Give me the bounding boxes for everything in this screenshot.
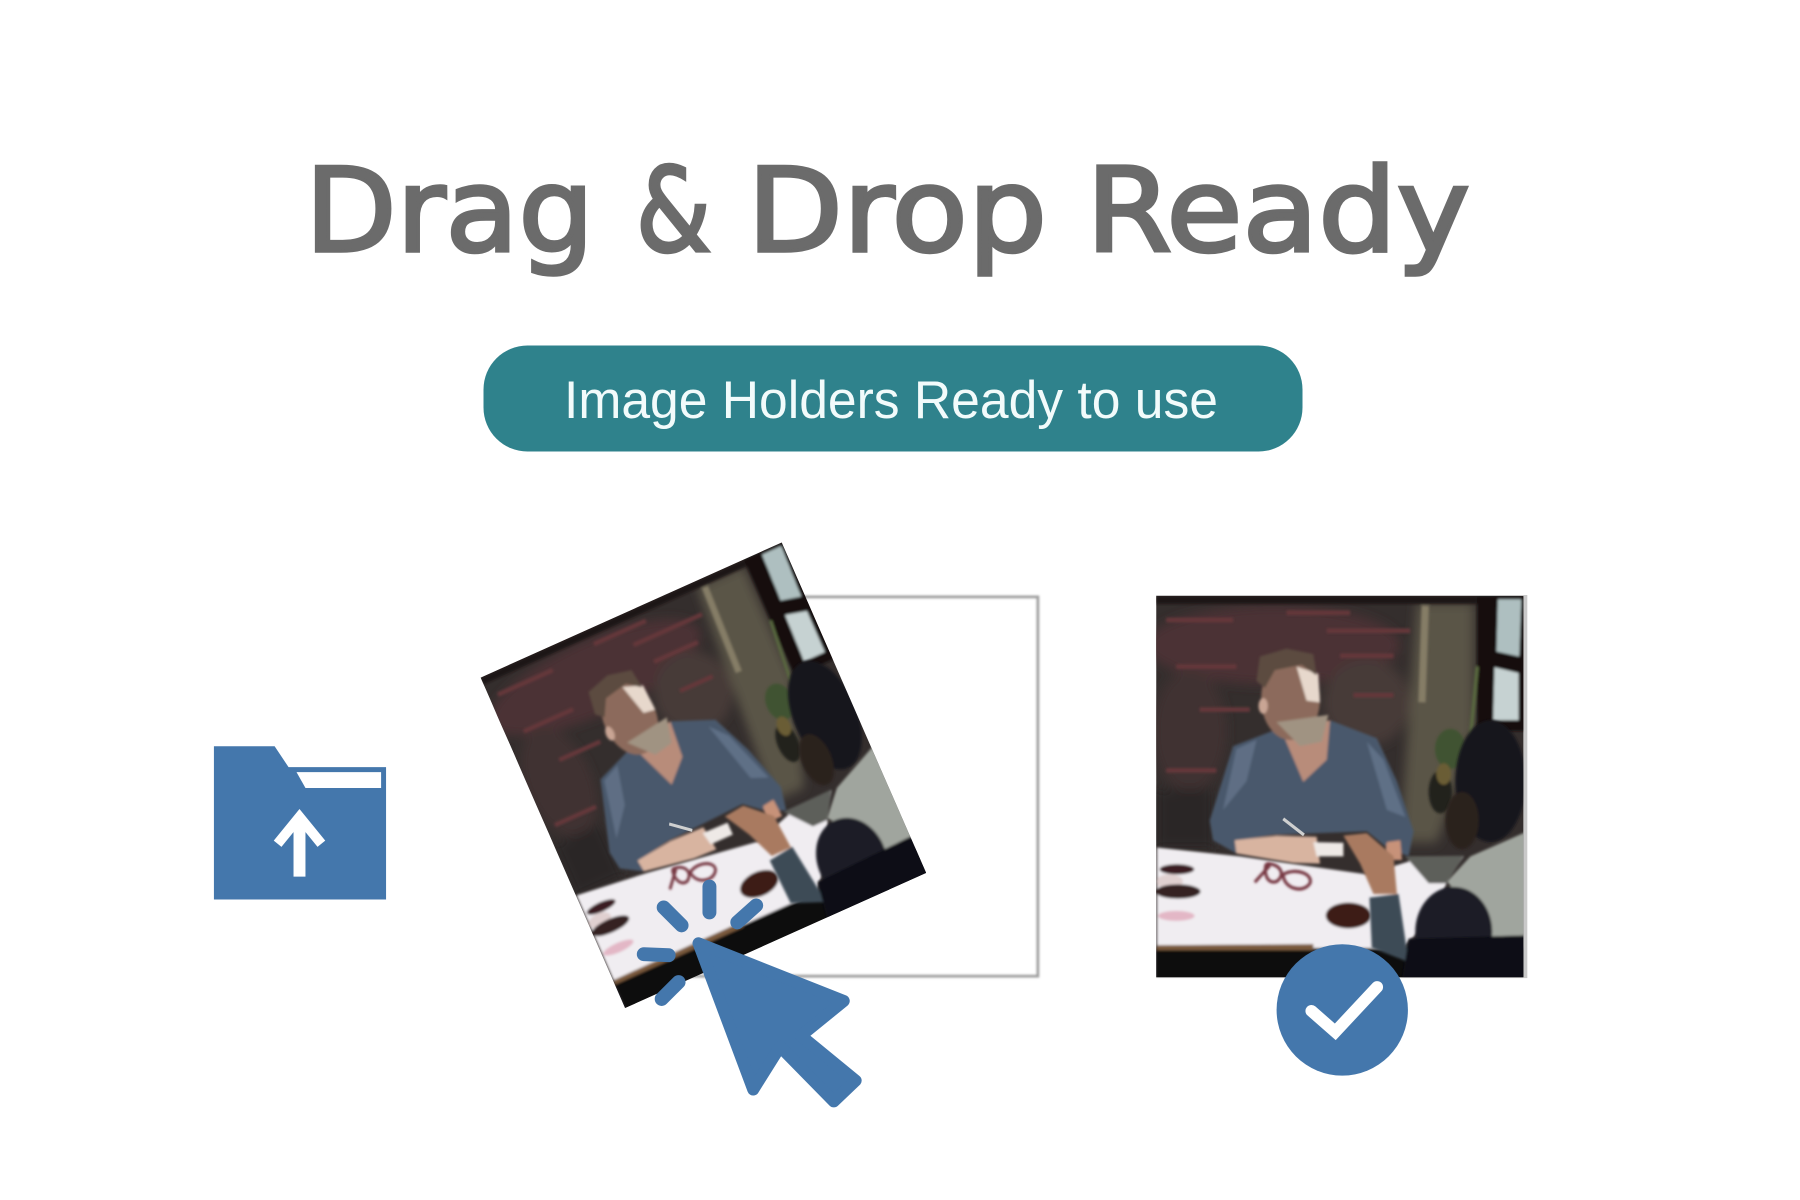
empty image holder frame [667,597,1038,976]
icon: folder upload [214,746,386,899]
icon: check badge [1277,944,1408,1076]
subtitle pill [484,346,1302,452]
title: Drop [747,144,1047,279]
title [305,144,1470,279]
icon: click sparks [644,887,756,999]
placed photo in holder [1146,595,1527,980]
title: & [636,144,711,279]
scaled illustration row [214,541,1527,1101]
subtitle pill: Image Holders Ready to use [564,371,1218,430]
title: Ready [1086,144,1470,279]
title: Drag [305,144,594,279]
icon: mouse cursor arrow [698,943,856,1101]
rotated photo being dragged [472,541,931,1015]
